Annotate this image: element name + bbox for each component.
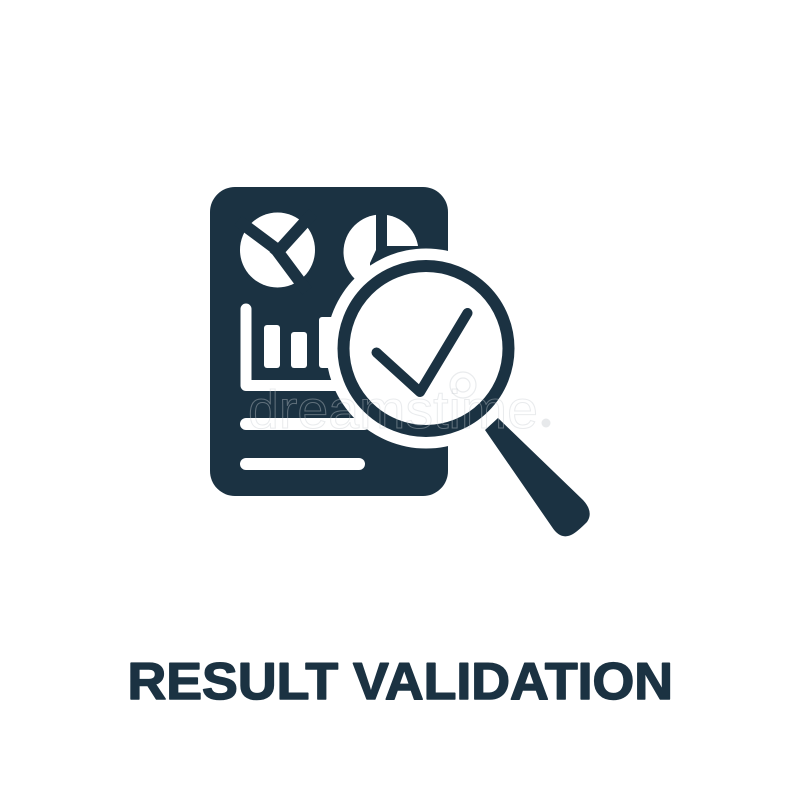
magnifier halo bbox=[326, 248, 526, 448]
magnifier handle bbox=[485, 418, 590, 536]
document panel bbox=[210, 187, 448, 496]
title: RESULT VALIDATION bbox=[128, 652, 673, 710]
icon: report document with magnifier bbox=[210, 187, 590, 536]
text line two bbox=[240, 458, 365, 470]
icon: first pie chart bbox=[238, 212, 315, 291]
bar chart bbox=[246, 309, 340, 386]
icon: check mark bbox=[376, 313, 468, 392]
icon: second pie chart bbox=[344, 208, 425, 290]
magnifier lens ring bbox=[344, 266, 508, 431]
watermark: dreamstime bbox=[248, 380, 538, 440]
text line one bbox=[240, 418, 370, 430]
